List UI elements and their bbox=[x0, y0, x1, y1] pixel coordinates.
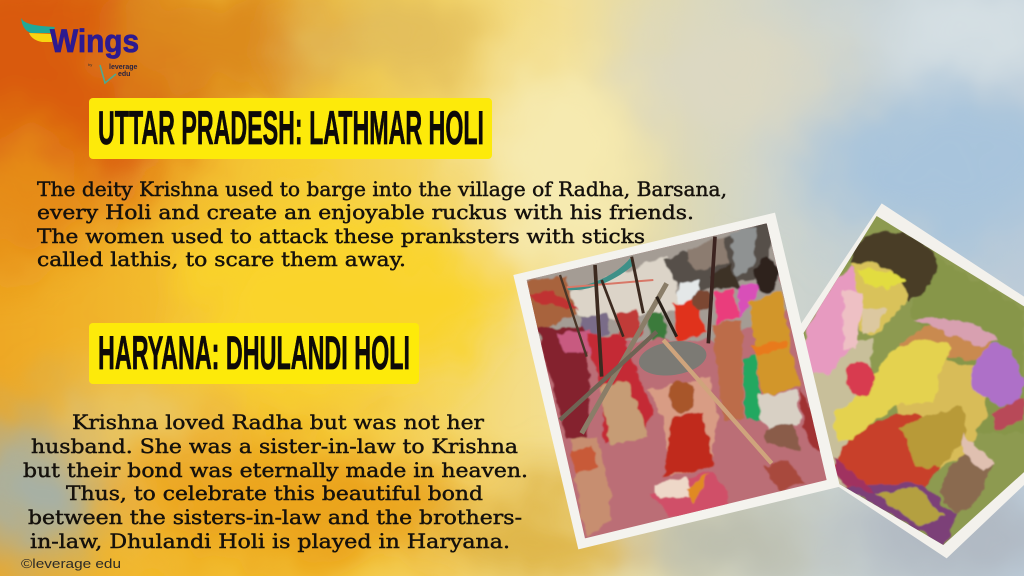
text block: Dhulandi Holi: Thus, to celebrate this beautiful bond bbox=[66, 481, 483, 505]
text block: Dhulandi Holi: between the sisters-in-law and the brothers- bbox=[28, 505, 522, 529]
text block: Lathmar Holi: The women used to attack these pranksters with sticks bbox=[37, 224, 645, 248]
text block: Dhulandi Holi bbox=[23, 410, 528, 553]
heading: Haryana: HARYANA: DHULANDI HOLI bbox=[98, 326, 410, 379]
text block: Lathmar Holi: called lathis, to scare them away. bbox=[37, 247, 406, 271]
photo: faces covered in Holi colour bbox=[801, 204, 1024, 558]
text block: Dhulandi Holi: in-law, Dhulandi Holi is played in Haryana. bbox=[30, 529, 510, 553]
heading: Uttar Pradesh: UTTAR PRADESH: LATHMAR HOLI bbox=[98, 101, 484, 154]
text block: Dhulandi Holi: husband. She was a sister-in-law to Krishna bbox=[31, 434, 518, 458]
heading: Uttar Pradesh bbox=[89, 98, 492, 159]
logo: Wings by leverage edu: Wings bbox=[50, 23, 139, 59]
logo: Wings by leverage edu: by bbox=[88, 62, 92, 67]
copyright: ©leverage edu bbox=[21, 556, 121, 571]
text block: Lathmar Holi bbox=[37, 177, 727, 271]
text block: Lathmar Holi: every Holi and create an enjoyable ruckus with his friends. bbox=[37, 200, 694, 224]
logo: Wings by leverage edu bbox=[21, 18, 139, 83]
logo: Wings by leverage edu: leverage bbox=[109, 64, 138, 71]
logo: Wings by leverage edu: edu bbox=[118, 71, 130, 78]
photo: Lathmar Holi women with sticks bbox=[513, 213, 840, 549]
text block: Dhulandi Holi: Krishna loved Radha but was not her bbox=[72, 410, 484, 434]
text block: Dhulandi Holi: but their bond was eternally made in heaven. bbox=[23, 458, 528, 482]
heading: Haryana bbox=[89, 323, 419, 384]
text block: Lathmar Holi: The deity Krishna used to barge into the village of Radha, Barsana, bbox=[37, 177, 727, 201]
